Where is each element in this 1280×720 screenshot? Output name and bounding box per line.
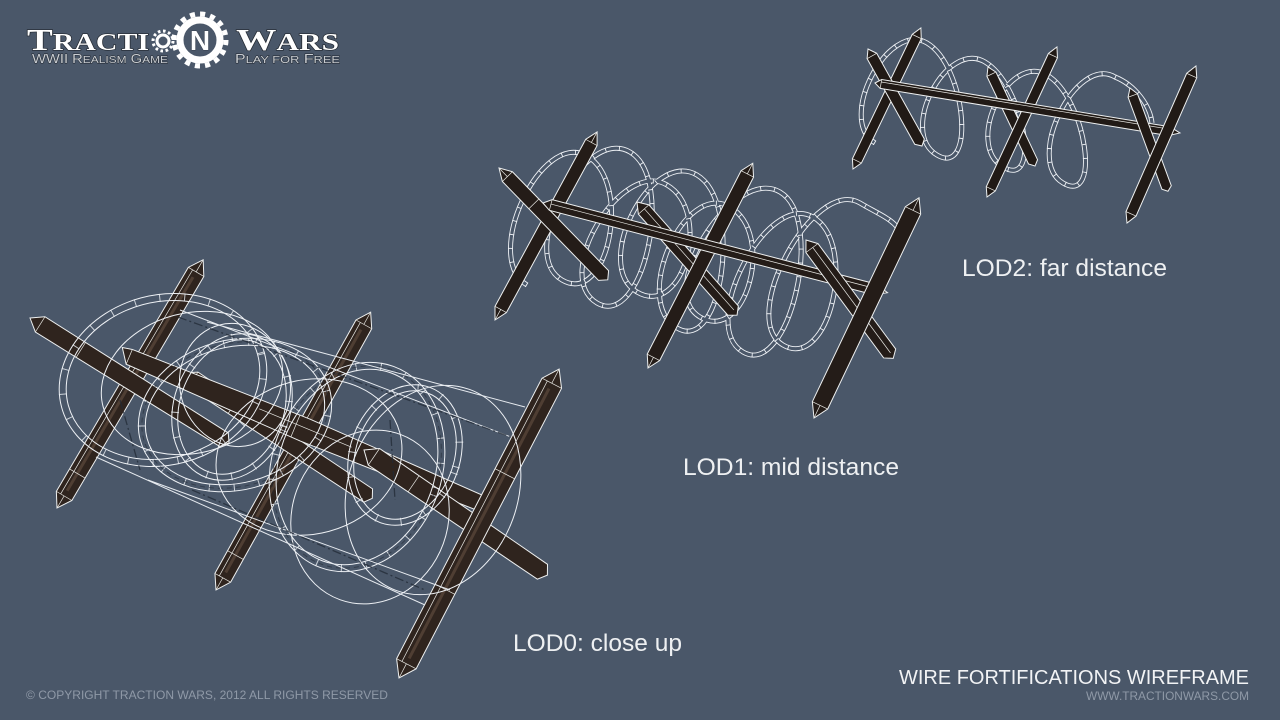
- logo wordmark right: W ARS: [236, 22, 339, 57]
- coil ring 1: [40, 271, 286, 489]
- logo tagline left: WWII R EALISM GAME: [32, 51, 168, 66]
- coil ring 3: [121, 317, 349, 513]
- LOD1 wire fortification model: [489, 129, 927, 422]
- website: WWW.TRACTIONWARS.COM: [1086, 689, 1249, 703]
- longitudinal wires: [96, 310, 525, 605]
- label: LOD2: LOD2: far distance: [962, 255, 1167, 282]
- coil ring 8: [329, 369, 481, 541]
- logo large gear with N: [174, 14, 226, 66]
- coil ring 4: [166, 311, 304, 459]
- LOD2 wire fortification model: [848, 26, 1201, 225]
- coil ring 4b: [152, 317, 312, 497]
- coil ring 7: [317, 360, 549, 620]
- LOD2 stakes: [848, 26, 1201, 225]
- coil ring 5: [198, 358, 420, 556]
- logo small gear: [153, 31, 173, 51]
- LOD0 wire fortification model: [25, 255, 569, 683]
- LOD2 coil: [861, 40, 1152, 186]
- logo: Traction Wars: [27, 14, 340, 66]
- barbed strands: [120, 317, 511, 590]
- LOD0 stakes: [25, 255, 569, 683]
- logo large gear with N: N: [190, 25, 210, 56]
- coil ring 5b: [267, 408, 473, 626]
- LOD0 barbed wire coils: [40, 271, 549, 626]
- LOD1 stakes: [489, 129, 927, 422]
- LOD1 coil: [510, 148, 897, 355]
- logo tagline right: PLAY FOR FREE: [235, 51, 340, 66]
- coil ring 6: [241, 337, 473, 597]
- label: LOD0: LOD0: close up: [513, 630, 682, 657]
- title: WIRE FORTIFICATIONS WIREFRAME: [899, 667, 1249, 689]
- coil ring 2: [85, 292, 299, 474]
- copyright notice: © COPYRIGHT TRACTION WARS, 2012 ALL RIGHTS RESERVED: [26, 688, 388, 702]
- logo wordmark left: TRACTI: [27, 22, 149, 57]
- label: LOD1: LOD1: mid distance: [683, 454, 899, 481]
